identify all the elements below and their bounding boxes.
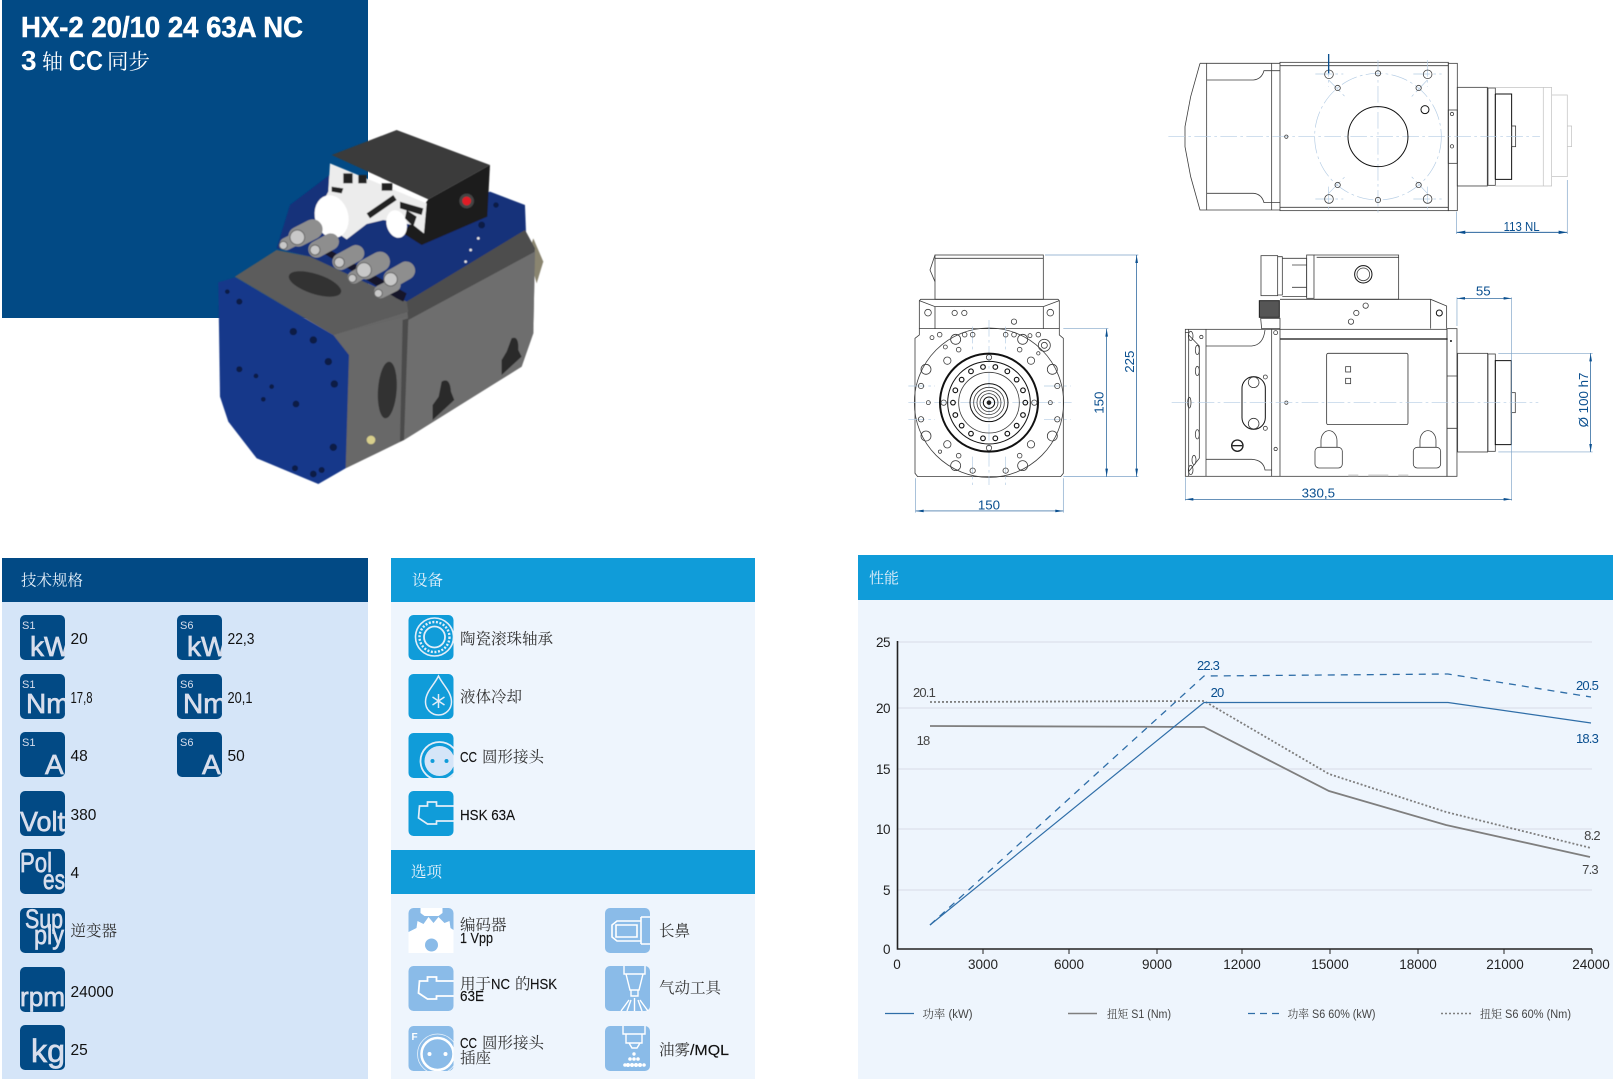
option: encoder — [408, 908, 507, 953]
dimension: diameter 100 h7 — [1498, 353, 1593, 452]
dimension: 150 height: 150 — [1091, 392, 1106, 414]
heading: technical specifications: 技术规格 — [21, 572, 84, 590]
spec: S1 kW: kW — [30, 631, 71, 662]
option: HSK for NC: NC — [491, 976, 510, 993]
equipment: liquid cooling: 液体冷却 — [460, 688, 522, 706]
title panel — [2, 0, 368, 318]
spec: S6 A: 50 — [228, 748, 245, 765]
heading: performance: 性能 — [869, 570, 899, 587]
panel: equipment and options — [391, 558, 755, 1079]
equipment: CC round connector: 圆形接头 — [482, 748, 545, 766]
subtitle: 3 — [21, 45, 37, 76]
subtitle: 轴 — [42, 51, 63, 74]
drawing: front view — [908, 255, 1138, 513]
spec: S1 A: 48 — [70, 748, 88, 765]
line chart: power and torque curves: 20.5 — [1576, 678, 1599, 693]
option: oil mist MQL: /MQL — [690, 1042, 729, 1059]
equipment: liquid cooling — [408, 674, 522, 719]
spec: S1 Nm — [20, 674, 92, 719]
spec: Poles: 4 — [70, 865, 80, 882]
line chart: power and torque curves: 3000 — [968, 957, 998, 972]
option: HSK for NC: 用于 — [460, 975, 491, 993]
option: HSK for NC: HSK — [530, 976, 557, 993]
spec: S6 Nm: 20,1 — [228, 690, 252, 707]
dimension: 55: 55 — [1476, 284, 1491, 299]
spec: S6 kW: S6 — [180, 620, 193, 632]
dimension: diameter 100 h7: Ø 100 h7 — [1576, 373, 1591, 427]
dimension: 113 NL — [1329, 54, 1567, 234]
line chart: power and torque curves: 24000 — [1572, 957, 1610, 972]
option: encoder: 编码器 — [460, 916, 507, 934]
dimension: 330,5 — [1185, 297, 1512, 501]
line chart: power and torque curves: 20 — [1211, 685, 1224, 700]
option: CC socket: CC — [460, 1035, 477, 1052]
spec: S1 A: A — [45, 749, 64, 780]
option: long nose: 长鼻 — [659, 922, 690, 940]
dimension: 150 width — [916, 478, 1063, 513]
line chart: power and torque curves: 0 — [893, 957, 901, 972]
spec: S6 A: A — [202, 749, 221, 780]
spec: S1 kW: 20 — [70, 631, 88, 648]
spec: kg: 25 — [70, 1042, 88, 1059]
equipment: ceramic bearing — [408, 615, 554, 660]
legend: 功率 S6 60% (kW) — [1288, 1007, 1376, 1021]
line chart: power and torque curves: 21000 — [1486, 957, 1524, 972]
heading: equipment: 设备 — [412, 572, 444, 590]
option: oil mist MQL: 油雾 — [659, 1041, 690, 1059]
line chart: power and torque curves — [876, 635, 1610, 972]
option: HSK for NC: 的 — [515, 975, 531, 993]
spec: S1 Nm: S1 — [22, 679, 35, 691]
line chart: power and torque curves: 18.3 — [1576, 731, 1599, 746]
option: CC socket: 圆形接头 — [482, 1034, 545, 1052]
spec: Volt — [20, 791, 97, 837]
drawing: top view — [1168, 54, 1572, 234]
line chart: power and torque curves: 7.3 — [1582, 862, 1598, 877]
panel: technical specifications — [2, 558, 368, 1079]
subtitle: 同步 — [107, 50, 150, 74]
option: CC socket — [408, 1026, 545, 1074]
option: pneumatic tool — [605, 966, 723, 1011]
spec: S6 A: S6 — [180, 737, 193, 749]
spec: S1 A: S1 — [22, 737, 35, 749]
option: HSK for NC: 63E — [460, 988, 484, 1005]
spec: S6 kW: kW — [187, 631, 228, 662]
spec: S1 kW: S1 — [22, 620, 35, 632]
spec: S1 A — [20, 732, 88, 780]
spec: Supply: 逆变器 — [70, 922, 118, 940]
equipment: CC round connector: CC — [460, 749, 477, 766]
line chart: power and torque curves: 9000 — [1142, 957, 1172, 972]
drawing: side view — [1172, 255, 1593, 501]
line chart: power and torque curves: 18000 — [1399, 957, 1437, 972]
legend: 扭矩 S6 60% (Nm) — [1480, 1007, 1571, 1021]
line chart: power and torque curves: 8.2 — [1584, 828, 1600, 843]
option: encoder: 1 Vpp — [460, 930, 493, 947]
spec: Supply — [20, 904, 118, 953]
line chart: power and torque curves: 20.1 — [913, 685, 936, 700]
equipment: CC round connector — [408, 733, 545, 780]
spec: Volt: 380 — [70, 807, 97, 824]
spec: S1 kW — [20, 615, 88, 662]
heading: options: 选项 — [411, 863, 443, 881]
dimension: 330,5: 330,5 — [1302, 486, 1335, 501]
line chart: power and torque curves: 5 — [883, 883, 890, 898]
subtitle: CC — [69, 45, 103, 76]
spec: S6 Nm — [177, 674, 252, 719]
option: CC socket: 插座 — [460, 1048, 491, 1067]
line chart: power and torque curves: 15 — [876, 762, 890, 777]
legend: 功率 (kW) — [922, 1007, 973, 1021]
legend: 扭矩 S1 (Nm) — [1107, 1007, 1171, 1021]
option: pneumatic tool: 气动工具 — [659, 979, 723, 997]
spec: Poles: Pol — [20, 847, 52, 878]
dimension: 150 height — [1045, 255, 1138, 477]
line chart: power and torque curves: 6000 — [1054, 957, 1084, 972]
title: HX-2 20/10 24 63A NC — [21, 12, 303, 44]
spec: S6 Nm: Nm — [183, 688, 227, 719]
spec: S6 A — [177, 732, 245, 780]
option: CC socket: F — [412, 1032, 418, 1043]
legend — [885, 1007, 1571, 1021]
equipment: HSK 63A — [408, 791, 515, 836]
option: HSK for NC — [408, 966, 557, 1011]
spec: S6 kW: 22,3 — [228, 631, 254, 648]
dimension: 225: 225 — [1122, 351, 1137, 373]
option: oil mist MQL — [605, 1026, 729, 1071]
panel: performance — [858, 555, 1613, 1079]
line chart: power and torque curves: 10 — [876, 822, 890, 837]
spec: S6 kW — [177, 615, 254, 662]
line chart: power and torque curves: 0 — [883, 942, 890, 957]
line chart: power and torque curves: 25 — [876, 635, 890, 650]
spec: Poles — [20, 847, 80, 895]
equipment: ceramic bearing: 陶瓷滚珠轴承 — [460, 630, 554, 648]
line chart: power and torque curves: 18 — [917, 733, 930, 748]
spec: kg: kg — [31, 1033, 65, 1069]
equipment: HSK 63A: HSK 63A — [460, 807, 515, 824]
line chart: power and torque curves: 12000 — [1223, 957, 1261, 972]
spec: S1 Nm: 17,8 — [70, 690, 92, 707]
spec: rpm — [20, 967, 114, 1012]
spec: rpm: 24000 — [70, 984, 114, 1001]
line chart: power and torque curves: 22.3 — [1197, 658, 1220, 673]
product image: spindle unit — [218, 130, 543, 484]
spec: kg — [20, 1025, 88, 1070]
spec: S6 Nm: S6 — [180, 679, 193, 691]
line chart: power and torque curves: 20 — [876, 701, 890, 716]
option: long nose — [605, 908, 690, 953]
dimension: 113 NL: 113 NL — [1504, 219, 1540, 234]
dimension: 55 — [1457, 284, 1512, 326]
line chart: power and torque curves: 15000 — [1311, 957, 1349, 972]
subtitle — [21, 45, 150, 76]
spec: S1 Nm: Nm — [26, 688, 70, 719]
dimension: 150 width: 150 — [978, 497, 1000, 512]
